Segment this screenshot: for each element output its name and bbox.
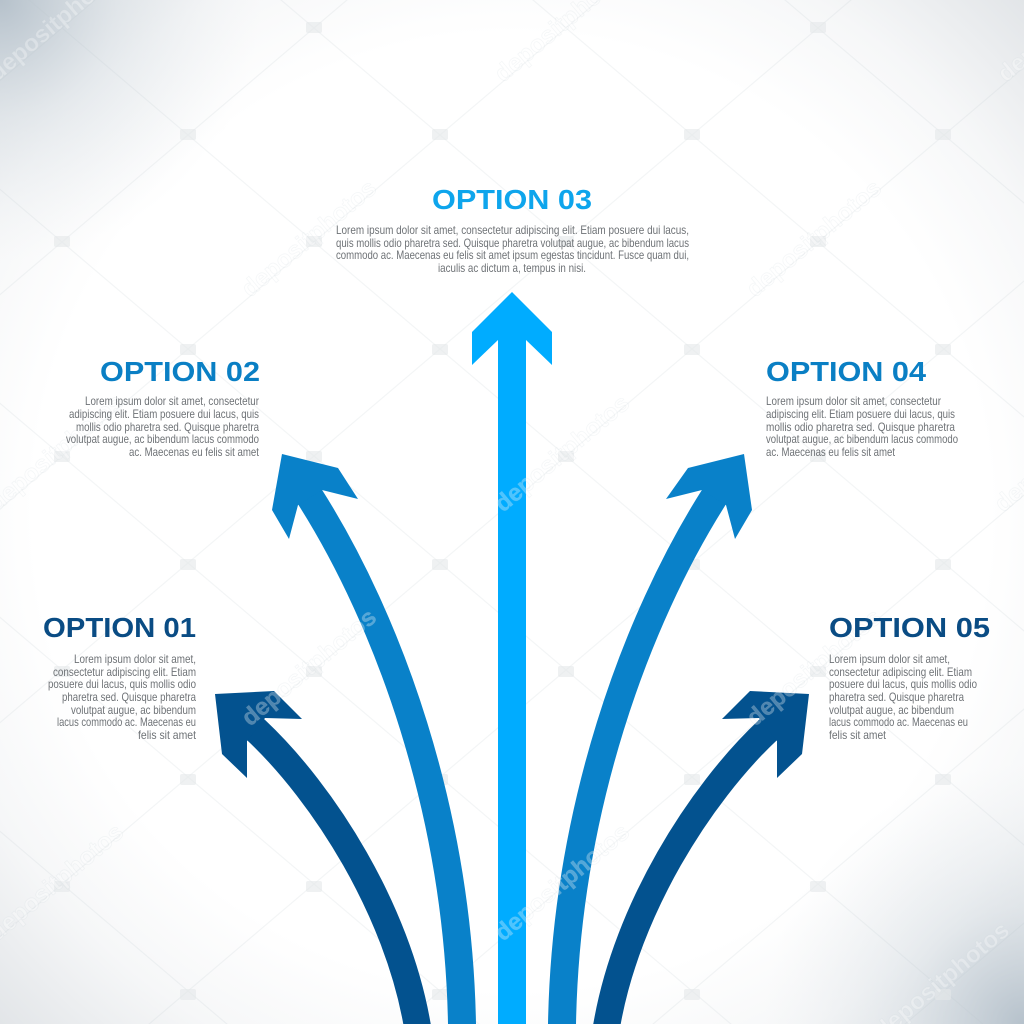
body: option 04 [766,394,958,459]
arrow: option 01 [215,691,422,1024]
body: option 05: lacus commodo ac. Maecenas eu [829,715,968,729]
body: option 05: felis sit amet [829,728,887,742]
body: option 03: iaculis ac dictum a, tempus in nisi. [438,261,586,275]
body: option 01: consectetur adipiscing elit. Etiam [53,665,196,679]
heading: option 03: OPTION 03 [432,184,592,215]
body: option 03: Lorem ipsum dolor sit amet, consectetur adipiscing elit. Etiam posuere dui lacus, [336,223,689,237]
text block: option 03 [336,184,689,275]
watermarks: depositphotos [490,390,635,518]
arrow: option 04 [562,454,752,1024]
body: option 05: Lorem ipsum dolor sit amet, [829,652,950,666]
body: option 01: volutpat augue, ac bibendum [71,703,196,717]
body: option 03 [336,223,689,275]
body: option 05 [829,652,977,742]
body: option 04: volutpat augue, ac bibendum lacus commodo [766,432,958,446]
text block: option 01 [43,612,197,742]
body: option 05: consectetur adipiscing elit. Etiam [829,665,972,679]
watermarks: depositphotos [237,175,382,303]
body: option 01: lacus commodo ac. Maecenas eu [57,715,196,729]
heading: option 02: OPTION 02 [100,356,260,387]
body: option 04: adipiscing elit. Etiam posuere dui lacus, quis [766,407,955,421]
body: option 01: posuere dui lacus, quis mollis odio [48,677,196,691]
body: option 05: pharetra sed. Quisque pharetra [829,690,964,704]
body: option 02: Lorem ipsum dolor sit amet, consectetur [85,394,259,408]
body: option 02: mollis odio pharetra sed. Quisque pharetra [76,420,259,434]
heading: option 05: OPTION 05 [829,612,990,643]
arrow: option 05 [602,691,809,1024]
body: option 02: ac. Maecenas eu felis sit amet [129,445,260,459]
text block: option 02 [66,356,260,459]
body: option 01 [48,652,197,742]
text block: option 05 [829,612,990,742]
arrow: option 02 [272,454,462,1024]
body: option 03: commodo ac. Maecenas eu felis sit amet ipsum egestas tincidunt. Fusce quam dui, [336,248,689,262]
watermarks: depositphotos [237,604,382,732]
watermarks: depositphotos [742,175,887,303]
body: option 05: volutpat augue, ac bibendum [829,703,954,717]
watermarks: depositphotos [490,819,635,947]
body: option 01: felis sit amet [138,728,197,742]
body: option 03: quis mollis odio pharetra sed. Quisque pharetra volutpat augue, ac bibendum lacus [336,236,689,250]
body: option 01: Lorem ipsum dolor sit amet, [74,652,196,666]
heading: option 04: OPTION 04 [766,356,926,387]
heading: option 01: OPTION 01 [43,612,196,643]
text block: option 04 [766,356,958,459]
watermarks: depositphotos [742,604,887,732]
arrow: option 03 [472,292,552,1024]
body: option 04: ac. Maecenas eu felis sit amet [766,445,896,459]
body: option 05: posuere dui lacus, quis mollis odio [829,677,977,691]
body: option 02: volutpat augue, ac bibendum lacus commodo [66,432,259,446]
body: option 01: pharetra sed. Quisque pharetra [62,690,196,704]
body: option 04: Lorem ipsum dolor sit amet, consectetur [766,394,941,408]
body: option 02 [66,394,260,459]
body: option 02: adipiscing elit. Etiam posuere dui lacus, quis [69,407,259,421]
body: option 04: mollis odio pharetra sed. Quisque pharetra [766,420,955,434]
